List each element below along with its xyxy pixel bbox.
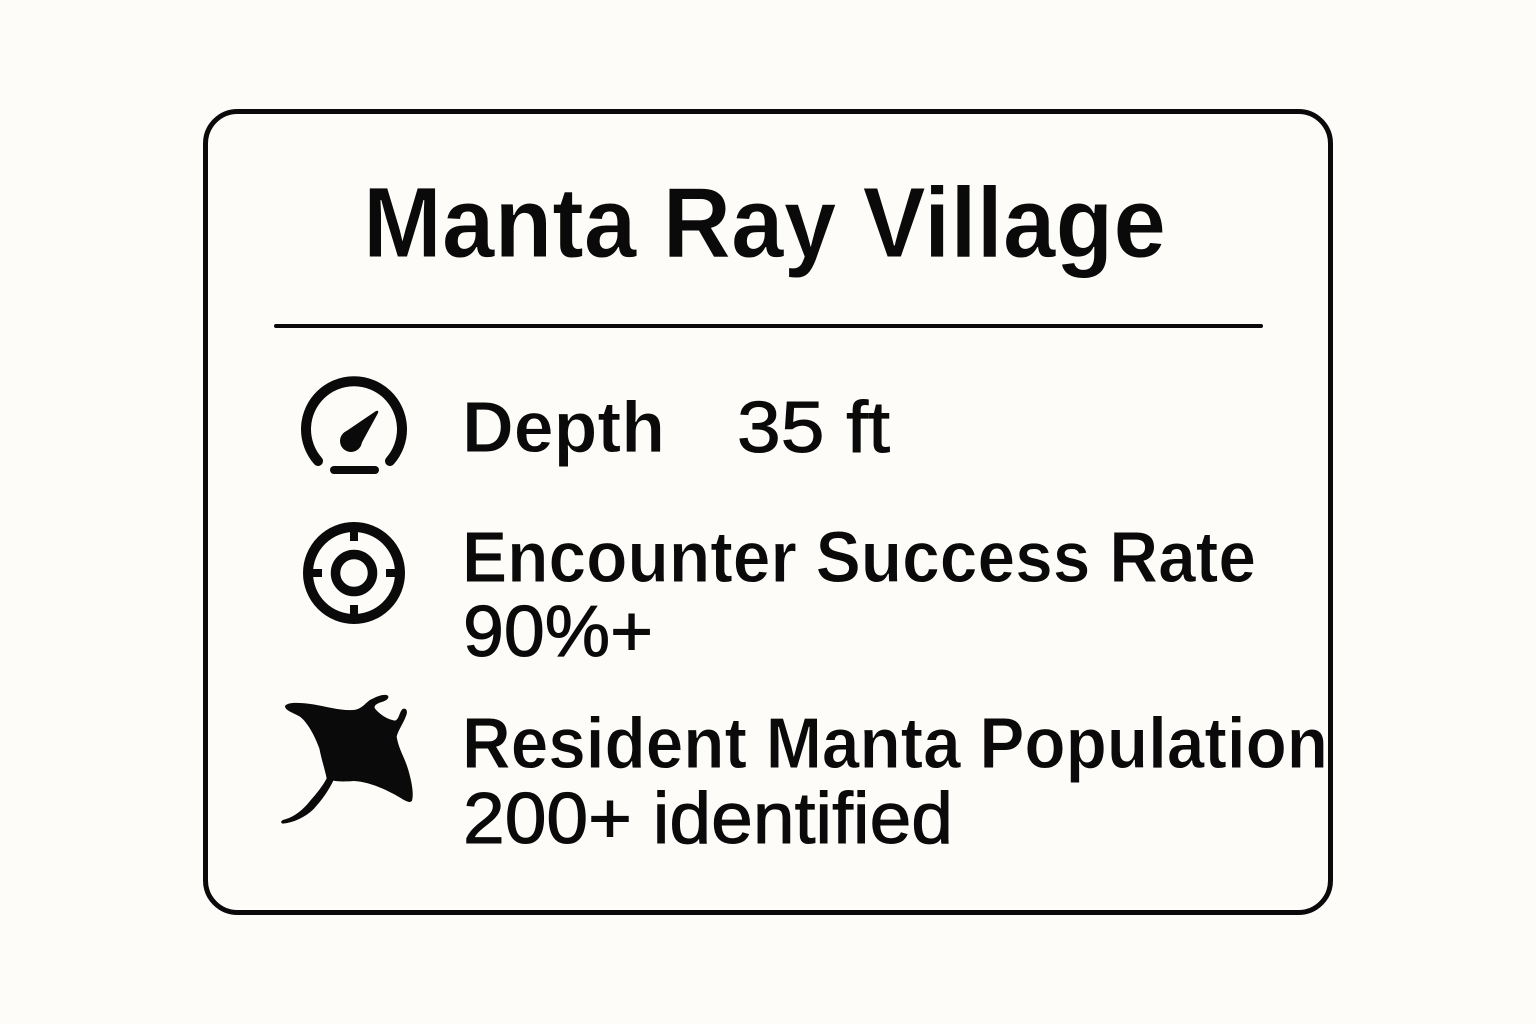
text: depth	[462, 388, 890, 468]
icon: depth gauge	[306, 381, 402, 470]
icon: target	[308, 527, 400, 619]
icon: manta ray	[281, 695, 413, 824]
text: resident manta population	[462, 704, 1328, 859]
title: Manta Ray Village	[363, 167, 1166, 279]
text: depth: Depth	[462, 388, 665, 468]
text: depth: 35 ft	[737, 388, 890, 468]
text: encounter success rate	[462, 518, 1256, 672]
text: resident manta population: Resident Manta Population	[462, 704, 1328, 784]
text: resident manta population: 200+ identified	[463, 779, 953, 859]
text: encounter success rate: Encounter Success Rate	[462, 518, 1256, 598]
panel: card	[206, 112, 1330, 912]
text: encounter success rate: 90%+	[463, 592, 653, 672]
